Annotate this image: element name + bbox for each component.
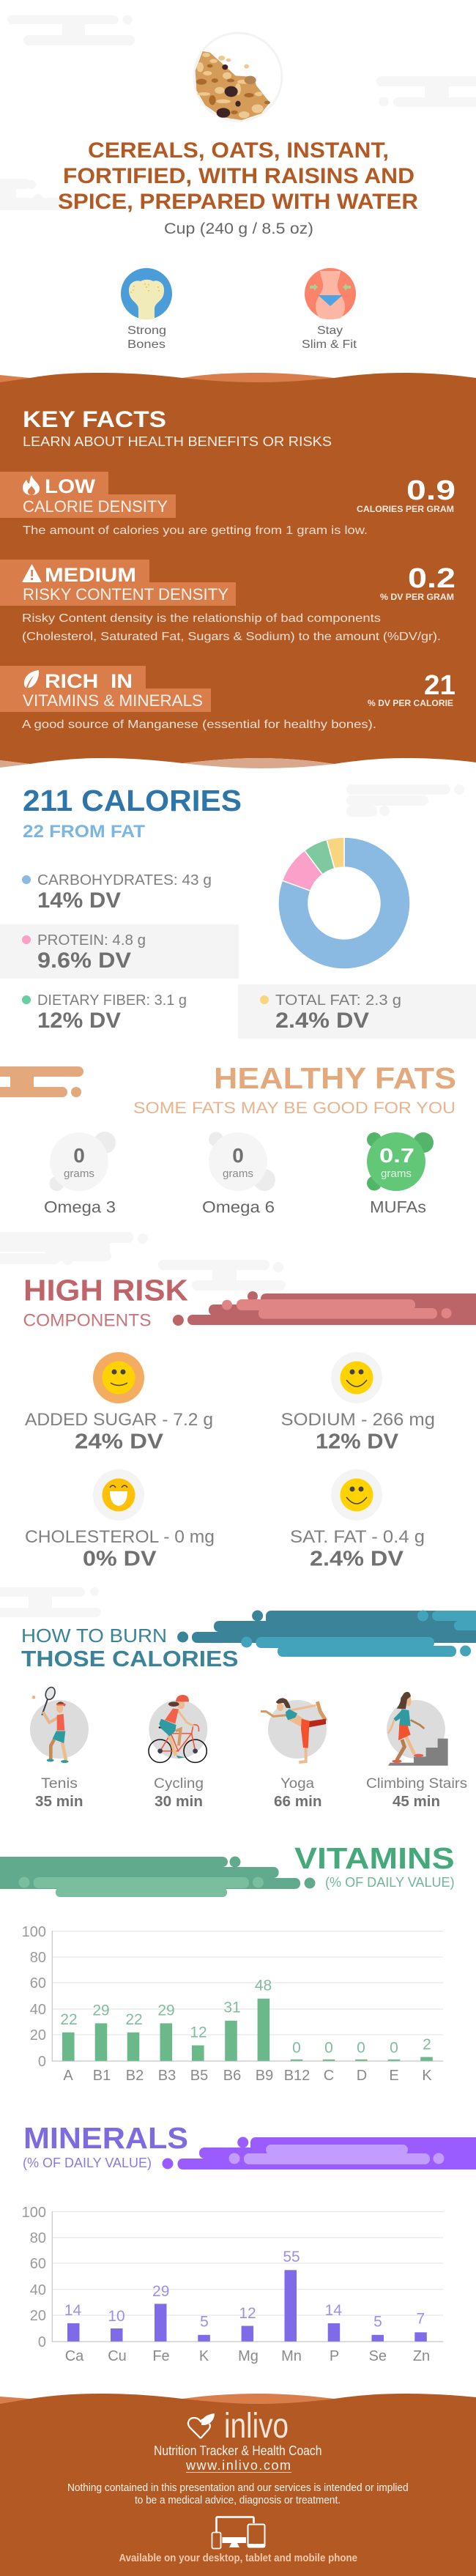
legend: dietary fiber xyxy=(22,992,187,1033)
bar chart: vitamins: B9 xyxy=(256,2068,273,2084)
icon: devices xyxy=(212,2517,265,2549)
icon: tennis player xyxy=(30,1686,89,1763)
bar chart: minerals: 5 xyxy=(373,2314,382,2331)
label: tennis: Tenis xyxy=(41,1776,78,1792)
decoration: burn calories band xyxy=(177,1610,476,1657)
food image: granola xyxy=(194,33,282,121)
mufas xyxy=(367,1132,434,1216)
risk: saturated fat: SAT. FAT - 0.4 g xyxy=(290,1527,425,1547)
calories from fat: 22 FROM FAT xyxy=(23,822,145,842)
mufas: MUFAs xyxy=(370,1198,426,1216)
high risk heading: HIGH RISK xyxy=(23,1273,188,1307)
panel: footer xyxy=(0,2394,476,2576)
bar chart: vitamins: 12 xyxy=(190,2024,207,2041)
fact: medium risky content density: RISKY CONTENT DENSITY xyxy=(23,585,228,604)
label: stay slim and fit xyxy=(302,324,357,351)
fact: low calorie density: LOW xyxy=(45,475,96,497)
risk: saturated fat: 2.4% DV xyxy=(310,1547,404,1570)
omega 6 xyxy=(202,1132,275,1216)
legend: protein: PROTEIN: 4.8 g xyxy=(37,932,146,949)
label: climbing stairs: 45 min xyxy=(393,1794,440,1810)
minerals subheading: (% OF DAILY VALUE) xyxy=(23,2156,152,2170)
fact: low calorie density: The amount of calories you are getting from 1 gram is low. xyxy=(23,524,368,537)
legend: total fat: 2.4% DV xyxy=(275,1009,369,1033)
fact: rich in vitamins and minerals xyxy=(0,666,455,731)
label: cycling: 30 min xyxy=(155,1794,203,1810)
donut chart xyxy=(278,837,410,969)
bar chart: vitamins: 0 xyxy=(38,2054,46,2070)
label: strong bones: Strong xyxy=(127,324,166,337)
bar chart: vitamins: 40 xyxy=(30,2002,46,2018)
bar chart: minerals: Se xyxy=(369,2348,387,2364)
bar chart: vitamins: 0 xyxy=(357,2040,365,2057)
disclaimer: to be a medical advice, diagnosis or treatment. xyxy=(135,2494,341,2506)
risk: cholesterol: CHOLESTEROL - 0 mg xyxy=(25,1527,215,1547)
risk: sodium: SODIUM - 266 mg xyxy=(281,1410,435,1430)
risk: added sugar xyxy=(25,1352,213,1453)
bar chart: minerals: 40 xyxy=(30,2282,46,2298)
logo: inlivo: inlivo xyxy=(224,2407,289,2446)
bar chart: vitamins: 0 xyxy=(292,2040,301,2057)
legend: total fat xyxy=(238,984,476,1039)
tagline: Nutrition Tracker & Health Coach xyxy=(154,2443,322,2458)
label: strong bones xyxy=(127,324,166,351)
disclaimer: Nothing contained in this presentation and our services is intended or implied xyxy=(67,2482,409,2494)
legend: carbohydrates: 14% DV xyxy=(37,888,121,913)
bar chart: vitamins: 22 xyxy=(125,2011,143,2028)
burn calories heading: HOW TO BURN xyxy=(21,1625,167,1647)
fact: rich in vitamins and minerals: VITAMINS & MINERALS xyxy=(23,691,203,710)
risk: cholesterol: 0% DV xyxy=(83,1547,157,1570)
risk: sodium: 12% DV xyxy=(316,1430,399,1453)
omega 3 xyxy=(44,1132,116,1216)
icon: strong bones xyxy=(121,268,172,319)
label: stay slim and fit: Stay xyxy=(317,324,343,337)
risk: sodium xyxy=(281,1352,435,1453)
logo: inlivo xyxy=(188,2407,289,2446)
decoration: healthy fats band xyxy=(0,1066,83,1097)
fact: low calorie density: 0.9 xyxy=(406,475,455,506)
fact: medium risky content density: 0.2 xyxy=(408,563,455,594)
icon: cyclist xyxy=(149,1695,207,1762)
legend: protein xyxy=(0,924,239,979)
legend: total fat: TOTAL FAT: 2.3 g xyxy=(275,992,401,1009)
legend: carbohydrates: CARBOHYDRATES: 43 g xyxy=(37,872,212,888)
disclaimer xyxy=(67,2482,409,2506)
bar chart: minerals: Mn xyxy=(281,2348,302,2364)
label: yoga xyxy=(274,1776,322,1810)
bar chart: minerals: Zn xyxy=(413,2348,430,2364)
bar chart: vitamins: B12 xyxy=(284,2068,310,2084)
mufas: 0.7 xyxy=(379,1144,414,1167)
fact: low calorie density xyxy=(0,472,455,537)
bar chart: minerals: Ca xyxy=(65,2348,84,2364)
bar chart: minerals: Cu xyxy=(108,2348,127,2364)
healthy fats subheading: SOME FATS MAY BE GOOD FOR YOU xyxy=(133,1099,455,1117)
bar chart: vitamins: C xyxy=(324,2068,334,2084)
mufas: grams xyxy=(381,1168,412,1180)
bar chart: vitamins: 80 xyxy=(30,1950,46,1966)
bar chart: vitamins: B1 xyxy=(93,2068,111,2084)
label: yoga: 66 min xyxy=(274,1794,322,1810)
icon: yoga pose xyxy=(261,1698,327,1762)
label: climbing stairs xyxy=(366,1776,467,1810)
label: stay slim and fit: Slim & Fit xyxy=(302,338,357,351)
key facts subheading: LEARN ABOUT HEALTH BENEFITS OR RISKS xyxy=(23,434,332,449)
fact: medium risky content density: (Cholesterol, Saturated Fat, Sugars & Sodium) to the amount (%DV/gr). xyxy=(22,631,441,643)
bar chart: minerals: 80 xyxy=(30,2230,46,2246)
label: cycling: Cycling xyxy=(154,1776,204,1792)
bar chart: vitamins: 2 xyxy=(423,2036,431,2053)
fact: low calorie density: CALORIES PER GRAM xyxy=(357,504,454,514)
label: cycling xyxy=(154,1776,204,1810)
label: tennis: 35 min xyxy=(35,1794,83,1810)
bar chart: vitamins: K xyxy=(422,2068,432,2084)
omega 3: Omega 3 xyxy=(44,1198,116,1216)
bar chart: vitamins: 29 xyxy=(157,2002,175,2019)
label: yoga: Yoga xyxy=(280,1776,314,1792)
fact: rich in vitamins and minerals: 21 xyxy=(424,670,455,701)
bar chart: vitamins: B2 xyxy=(126,2068,144,2084)
fact: medium risky content density: Risky Content density is the relationship of bad components xyxy=(22,612,381,625)
availability note: Available on your desktop, tablet and mobile phone xyxy=(119,2552,357,2564)
fact: low calorie density: CALORIE DENSITY xyxy=(23,497,168,516)
bar chart: vitamins: 60 xyxy=(30,1975,46,1992)
bar chart: vitamins: B6 xyxy=(223,2068,241,2084)
fact: medium risky content density: % DV PER GRAM xyxy=(380,592,454,602)
fact: rich in vitamins and minerals: % DV PER CALORIE xyxy=(368,698,453,708)
vitamins subheading: (% OF DAILY VALUE) xyxy=(325,1875,455,1890)
bar chart: minerals: 14 xyxy=(64,2302,81,2319)
bar chart: minerals: 20 xyxy=(30,2308,46,2324)
risk: added sugar: 24% DV xyxy=(75,1430,164,1453)
icon: climbing stairs xyxy=(387,1692,448,1766)
burn calories heading: THOSE CALORIES xyxy=(21,1646,239,1671)
icon: stay slim and fit xyxy=(305,268,356,319)
bar chart: minerals: K xyxy=(199,2348,209,2364)
bar chart: vitamins: 0 xyxy=(324,2040,333,2057)
bar chart: minerals: 14 xyxy=(325,2302,342,2319)
title: FORTIFIED, WITH RAISINS AND xyxy=(63,164,414,188)
website link: www.inlivo.com xyxy=(185,2458,291,2473)
healthy fats heading: HEALTHY FATS xyxy=(214,1061,456,1095)
bar chart: vitamins: 29 xyxy=(92,2002,110,2019)
burn calories heading xyxy=(21,1625,239,1671)
vitamins heading: VITAMINS xyxy=(294,1841,455,1875)
key facts heading: KEY FACTS xyxy=(23,406,166,432)
bar chart: minerals: Mg xyxy=(238,2348,259,2364)
title: SPICE, PREPARED WITH WATER xyxy=(58,190,418,214)
risk: saturated fat xyxy=(290,1469,425,1570)
bar chart: minerals: 10 xyxy=(108,2308,125,2325)
legend: carbohydrates xyxy=(22,872,212,913)
bar chart: minerals: 12 xyxy=(239,2305,256,2322)
bar chart: minerals: Fe xyxy=(152,2348,170,2364)
high risk subheading: COMPONENTS xyxy=(23,1311,151,1330)
title: CEREALS, OATS, INSTANT, xyxy=(88,138,389,163)
omega 6: grams xyxy=(223,1168,253,1180)
bar chart: minerals: P xyxy=(330,2348,339,2364)
bar chart: minerals: 5 xyxy=(200,2314,209,2331)
omega 3: grams xyxy=(64,1168,94,1180)
label: strong bones: Bones xyxy=(127,338,166,351)
omega 6: Omega 6 xyxy=(202,1198,275,1216)
bar chart: minerals: 7 xyxy=(416,2311,425,2328)
bar chart: vitamins: 20 xyxy=(30,2027,46,2044)
omega 3: 0 xyxy=(73,1144,85,1167)
bar chart: vitamins: 31 xyxy=(223,2000,241,2016)
label: tennis xyxy=(35,1776,83,1810)
legend: dietary fiber: 12% DV xyxy=(37,1009,121,1033)
legend: dietary fiber: DIETARY FIBER: 3.1 g xyxy=(37,992,187,1009)
bar chart: vitamins: D xyxy=(357,2068,367,2084)
decoration: vitamins band xyxy=(0,1856,315,1897)
bar chart: vitamins: B3 xyxy=(158,2068,176,2084)
bar chart: minerals: 0 xyxy=(38,2334,46,2350)
minerals heading: MINERALS xyxy=(23,2121,188,2155)
risk: cholesterol xyxy=(25,1469,215,1570)
fact: rich in vitamins and minerals: RICH IN xyxy=(45,670,133,692)
icon: warning triangle xyxy=(22,564,42,582)
risk: added sugar: ADDED SUGAR - 7.2 g xyxy=(25,1410,213,1430)
bar chart: minerals: 55 xyxy=(283,2249,300,2265)
fact: medium risky content density: MEDIUM xyxy=(45,564,136,586)
title xyxy=(58,138,418,214)
omega 6: 0 xyxy=(232,1144,244,1167)
bar chart: minerals: 29 xyxy=(152,2283,169,2300)
icon: flame xyxy=(23,475,40,495)
panel: key facts xyxy=(0,373,476,768)
fact: medium risky content density xyxy=(0,560,455,643)
bar chart: minerals xyxy=(22,2205,443,2364)
fact: rich in vitamins and minerals: A good source of Manganese (essential for healthy bones). xyxy=(22,719,376,731)
bar chart: minerals: 100 xyxy=(22,2205,46,2221)
bar chart: vitamins: 100 xyxy=(22,1924,46,1940)
calories heading: 211 CALORIES xyxy=(23,784,242,817)
decoration: minerals band xyxy=(163,2137,476,2169)
bar chart: vitamins: 0 xyxy=(390,2040,398,2057)
label: climbing stairs: Climbing Stairs xyxy=(366,1776,467,1792)
serving size: Cup (240 g / 8.5 oz) xyxy=(164,220,313,237)
bar chart: vitamins: A xyxy=(63,2068,73,2084)
bar chart: minerals: 60 xyxy=(30,2256,46,2272)
bar chart: vitamins: 22 xyxy=(60,2011,78,2028)
legend: protein: 9.6% DV xyxy=(37,949,131,973)
bar chart: vitamins: E xyxy=(389,2068,399,2084)
bar chart: vitamins: B5 xyxy=(190,2068,208,2084)
bar chart: vitamins: 48 xyxy=(255,1978,272,1994)
decoration: high risk band xyxy=(173,1291,476,1326)
bar chart: vitamins xyxy=(22,1924,443,2084)
icon: leaf xyxy=(24,670,39,688)
